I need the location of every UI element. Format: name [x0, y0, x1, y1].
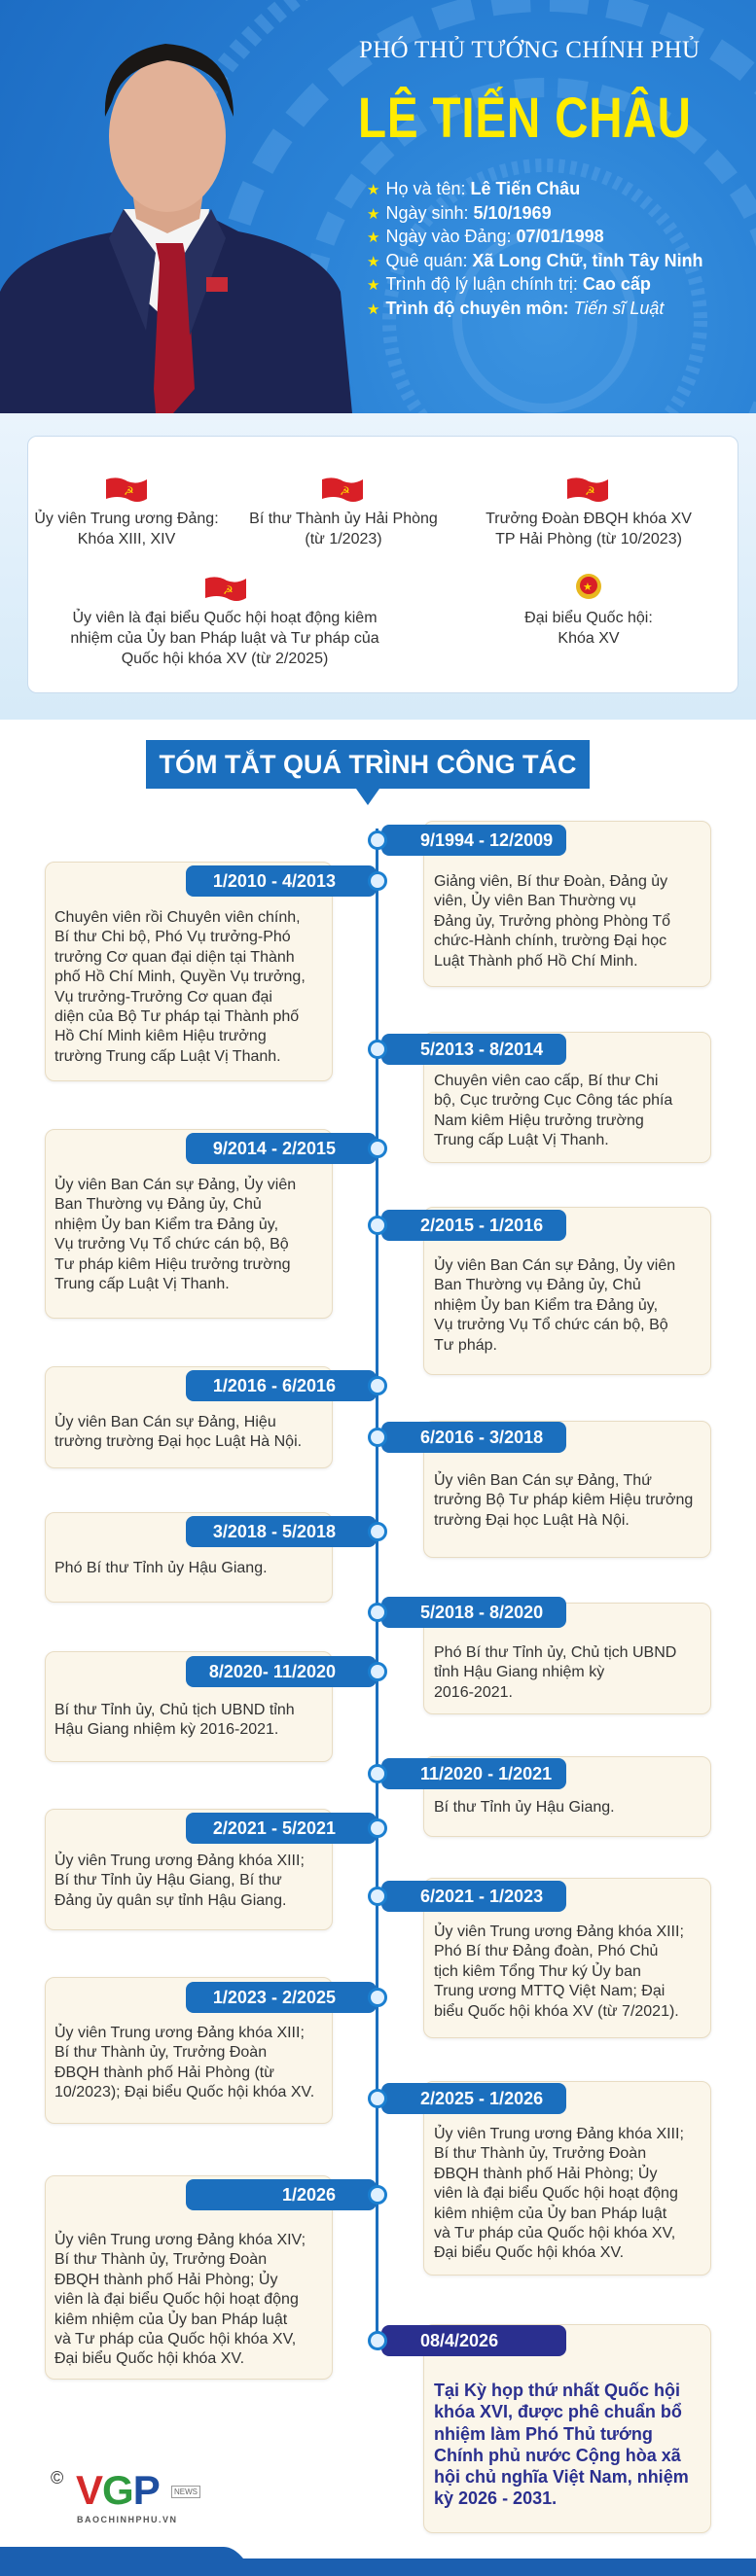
text: 2/2015 - 1/2016: [420, 1216, 543, 1235]
text: 2016-2021.: [434, 1684, 513, 1701]
icon: party flag 2: [322, 477, 363, 502]
logo: VGP: NEWS: [174, 2488, 198, 2496]
text: 2/2025 - 1/2026: [420, 2089, 543, 2108]
timeline entry: 9/2014 - 2/2015: [45, 1129, 333, 1319]
icon: party flag 4: ☭: [223, 583, 234, 597]
text: central committee: Ủy viên Trung ương Đảng:: [34, 511, 219, 527]
text: Bí thư Thành ủy, Trưởng Đoàn: [54, 2044, 267, 2061]
text: kiêm nhiệm của Ủy ban Pháp luật: [434, 2205, 666, 2222]
text: Đại biểu Quốc hội khóa XV.: [434, 2244, 624, 2261]
text: law committee: Quốc hội khóa XV (từ 2/2025): [122, 651, 328, 667]
text: kiêm nhiệm của Ủy ban Pháp luật: [54, 2311, 287, 2328]
text: NA delegation head: [486, 511, 692, 547]
text: viên là đại biểu Quốc hội hoạt động: [54, 2291, 299, 2308]
text: 6/2016 - 3/2018: [420, 1428, 543, 1447]
text: 5/2018 - 8/2020: [420, 1603, 543, 1622]
text: Ủy viên Trung ương Đảng khóa XIII;: [434, 1923, 684, 1940]
text: Phó Bí thư Tỉnh ủy, Chủ tịch UBND: [434, 1644, 676, 1661]
text: NA delegation head: Trưởng Đoàn ĐBQH khóa XV: [486, 511, 692, 527]
timeline entry: 1/2016 - 6/2016: [45, 1366, 333, 1468]
text: Tại Kỳ họp thứ nhất Quốc hội: [434, 2381, 680, 2400]
text: Giảng viên, Bí thư Đoàn, Đảng ủy: [434, 873, 667, 890]
text: 9/2014 - 2/2015: [213, 1139, 336, 1158]
text: central committee: Khóa XIII, XIV: [78, 531, 175, 547]
text: trường trường Đại học Luật Hà Nội.: [54, 1433, 302, 1450]
text: Hậu Giang nhiệm kỳ 2016-2021.: [54, 1721, 278, 1738]
text: Hai Phong secretary: (từ 1/2023): [305, 531, 382, 547]
text: central committee: [34, 510, 219, 547]
text: nhiệm làm Phó Thủ tướng: [434, 2424, 653, 2444]
suit: [0, 209, 352, 413]
text: Trung ương MTTQ Việt Nam; Đại: [434, 1983, 665, 1999]
text: Bí thư Tỉnh ủy Hậu Giang.: [434, 1799, 615, 1816]
text: 11/2020 - 1/2021: [420, 1764, 552, 1783]
text: Ban Thường vụ Đảng ủy, Chủ: [54, 1196, 262, 1213]
text: Ban Thường vụ Đảng ủy, Chủ: [434, 1277, 641, 1293]
text: nhiệm Ủy ban Kiểm tra Đảng ủy,: [434, 1297, 658, 1314]
text: 1/2023 - 2/2025: [213, 1988, 336, 2007]
timeline entry: 3/2018 - 5/2018: [45, 1512, 333, 1603]
timeline entry: 11/2020 - 1/2021: [423, 1756, 711, 1837]
text: Bí thư Tỉnh ủy, Chủ tịch UBND tỉnh: [54, 1702, 295, 1718]
icon: party flag 1: ☭: [124, 484, 134, 498]
tie: [154, 243, 195, 413]
info list: ★ Họ và tên: Lê Tiến Châu: [367, 179, 580, 198]
text: biểu Quốc hội khóa XV (từ 7/2021).: [434, 2003, 679, 2020]
section heading banner: [146, 740, 590, 805]
text: 6/2021 - 1/2023: [420, 1887, 543, 1906]
text: Ủy viên Trung ương Đảng khóa XIV;: [54, 2232, 306, 2248]
text: Ủy viên Trung ương Đảng khóa XIII;: [54, 1853, 305, 1869]
text: Phó Bí thư Đảng đoàn, Phó Chủ: [434, 1943, 658, 1959]
text: và Tư pháp của Quốc hội khóa XV,: [434, 2225, 675, 2241]
text: Chuyên viên cao cấp, Bí thư Chi: [434, 1073, 658, 1089]
info list: [367, 179, 703, 318]
timeline entry: 2/2025 - 1/2026: [423, 2081, 711, 2276]
text: Bí thư Tỉnh ủy Hậu Giang, Bí thư: [54, 1872, 282, 1888]
text: Hồ Chí Minh kiêm Hiệu trưởng: [54, 1028, 267, 1044]
text: NA delegation head: TP Hải Phòng (từ 10/2023): [495, 531, 682, 547]
text: NA deputy: [524, 610, 653, 647]
timeline entry: 1/2023 - 2/2025: [45, 1977, 333, 2124]
icon: national emblem: [576, 574, 601, 599]
shirt: [124, 209, 209, 321]
text: Vụ trưởng Vụ Tổ chức cán bộ, Bộ: [54, 1236, 289, 1253]
neck: [131, 185, 204, 233]
logo: VGP: VGP: [76, 2467, 160, 2513]
text: 2/2021 - 5/2021: [213, 1818, 336, 1838]
timeline entry: 9/1994 - 12/2009: [423, 821, 711, 987]
icon: national emblem: ★: [583, 582, 593, 593]
text: Ủy viên Trung ương Đảng khóa XIII;: [434, 2126, 684, 2142]
text: Ủy viên Ban Cán sự Đảng, Thứ: [434, 1472, 652, 1489]
info list: ★ Ngày sinh: 5/10/1969: [367, 203, 552, 223]
text: law committee: nhiệm của Ủy ban Pháp luật và Tư pháp của: [70, 630, 379, 647]
timeline entry: 2/2021 - 5/2021: [45, 1809, 333, 1930]
text: tịch kiêm Tổng Thư ký Ủy ban: [434, 1963, 641, 1980]
timeline entry: 08/4/2026 (final): [423, 2324, 711, 2533]
text: Đảng ủy, Trưởng phòng Phòng Tổ: [434, 913, 670, 930]
text: Trung cấp Luật Vị Thanh.: [434, 1132, 609, 1148]
icon: party flag 3: ☭: [585, 484, 595, 498]
text: Ủy viên Ban Cán sự Đảng, Ủy viên: [54, 1177, 296, 1193]
text: Đảng ủy quân sự tỉnh Hậu Giang.: [54, 1892, 286, 1909]
text: Phó Bí thư Tỉnh ủy Hậu Giang.: [54, 1560, 268, 1576]
timeline entry: 8/2020 - 11/2020: [45, 1651, 333, 1762]
text: viên là đại biểu Quốc hội hoạt động: [434, 2185, 678, 2202]
text: trưởng Cơ quan đại diện tại Thành: [54, 949, 295, 966]
icon: party flag 1: [106, 477, 147, 502]
text: ĐBQH thành phố Hải Phòng; Ủy: [434, 2166, 657, 2182]
text: 3/2018 - 5/2018: [213, 1522, 336, 1541]
icon: party flag 4: [205, 577, 246, 601]
text: Nam kiêm Hiệu trưởng trường: [434, 1112, 644, 1129]
text: Trung cấp Luật Vị Thanh.: [54, 1276, 230, 1292]
text: Bí thư Thành ủy, Trưởng Đoàn: [434, 2145, 646, 2162]
timeline entry: 6/2021 - 1/2023: [423, 1878, 711, 2038]
text: ĐBQH thành phố Hải Phòng; Ủy: [54, 2272, 277, 2288]
text: nhiệm Ủy ban Kiểm tra Đảng ủy,: [54, 1217, 278, 1233]
logo: VGP: ©: [51, 2468, 63, 2488]
text: phố Hồ Chí Minh, Quyền Vụ trưởng,: [54, 969, 306, 985]
text: Ủy viên Ban Cán sự Đảng, Ủy viên: [434, 1257, 675, 1274]
text: Đại biểu Quốc hội khóa XV.: [54, 2350, 244, 2367]
info list: ★ Quê quán: Xã Long Chữ, tỉnh Tây Ninh: [367, 251, 703, 270]
text: bộ, Cục trưởng Cục Công tác phía: [434, 1092, 672, 1109]
hair: [105, 44, 234, 117]
timeline entry: 2/2015 - 1/2016: [423, 1207, 711, 1375]
text: chức-Hành chính, trường Đại học: [434, 933, 666, 949]
text: Tư pháp kiêm Hiệu trưởng trường: [54, 1256, 291, 1273]
panel: positions: [27, 436, 738, 693]
text: viên, Ủy viên Ban Thường vụ: [434, 893, 636, 909]
footer bar: [0, 2547, 756, 2576]
text: Tư pháp.: [434, 1337, 497, 1354]
timeline entry: 1/2026: [45, 2175, 333, 2380]
text: Chính phủ nước Cộng hòa xã: [434, 2446, 681, 2465]
text: 1/2010 - 4/2013: [213, 871, 336, 891]
icon: party flag 3: [567, 477, 608, 502]
lapels: [109, 209, 156, 331]
text: Bí thư Chi bộ, Phó Vụ trưởng-Phó: [54, 929, 291, 945]
text: law committee: Ủy viên là đại biểu Quốc hội hoạt động kiêm: [72, 610, 378, 626]
text: Chuyên viên rồi Chuyên viên chính,: [54, 909, 301, 926]
info list: ★ Trình độ chuyên môn: Tiến sĩ Luật: [367, 299, 664, 318]
timeline line: [376, 829, 378, 2341]
info list: ★ Trình độ lý luận chính trị: Cao cấp: [367, 274, 651, 294]
title: position: PHÓ THỦ TƯỚNG CHÍNH PHỦ: [359, 37, 700, 63]
text: law committee: [70, 609, 379, 667]
logo: VGP: [51, 2467, 200, 2524]
text: NA deputy: Đại biểu Quốc hội:: [524, 610, 653, 626]
text: Hai Phong secretary: Bí thư Thành ủy Hải Phòng: [249, 511, 438, 527]
text: hội chủ nghĩa Việt Nam, nhiệm: [434, 2467, 689, 2487]
icon: party flag 2: ☭: [340, 484, 350, 498]
text: 5/2013 - 8/2014: [420, 1040, 543, 1059]
text: NA deputy: Khóa XV: [558, 630, 620, 647]
text: Vụ trưởng Vụ Tổ chức cán bộ, Bộ: [434, 1317, 668, 1333]
text: 08/4/2026: [420, 2331, 498, 2350]
text: Hai Phong secretary: [249, 511, 438, 547]
logo: VGP: BAOCHINHPHU.VN: [77, 2515, 178, 2524]
text: Ủy viên Ban Cán sự Đảng, Hiệu: [54, 1414, 276, 1430]
text: 1/2026: [282, 2185, 336, 2205]
face: [109, 60, 226, 212]
info list: ★ Ngày vào Đảng: 07/01/1998: [367, 227, 604, 246]
timeline entry: 5/2013 - 8/2014: [423, 1032, 711, 1163]
text: 9/1994 - 12/2009: [420, 830, 553, 850]
text: kỳ 2026 - 2031.: [434, 2488, 557, 2508]
text: trưởng Bộ Tư pháp kiêm Hiệu trưởng: [434, 1492, 693, 1508]
text: Luật Thành phố Hồ Chí Minh.: [434, 953, 638, 970]
light blue band: [0, 413, 756, 720]
portrait photo: [0, 44, 352, 413]
text: Bí thư Thành ủy, Trưởng Đoàn: [54, 2251, 267, 2268]
header background: [0, 0, 756, 413]
timeline entry: 1/2010 - 4/2013: [45, 862, 333, 1081]
title: name: LÊ TIẾN CHÂU: [358, 87, 692, 150]
text: trường Đại học Luật Hà Nội.: [434, 1512, 630, 1529]
text: 8/2020- 11/2020: [209, 1662, 336, 1681]
text: tỉnh Hậu Giang nhiệm kỳ: [434, 1664, 604, 1680]
text: diện của Bộ Tư pháp tại Thành phố: [54, 1008, 299, 1025]
text: Vụ trưởng-Trưởng Cơ quan đại: [54, 989, 272, 1006]
text: 10/2023); Đại biểu Quốc hội khóa XV.: [54, 2084, 314, 2100]
timeline entry: 5/2018 - 8/2020: [423, 1603, 711, 1714]
text: 1/2016 - 6/2016: [213, 1376, 336, 1395]
text: khóa XVI, được phê chuẩn bổ: [434, 2402, 682, 2421]
text: trường Trung cấp Luật Vị Thanh.: [54, 1048, 281, 1065]
pin: [206, 277, 228, 292]
text: Ủy viên Trung ương Đảng khóa XIII;: [54, 2025, 305, 2041]
text: ĐBQH thành phố Hải Phòng (từ: [54, 2064, 274, 2081]
text: và Tư pháp của Quốc hội khóa XV,: [54, 2331, 296, 2347]
timeline entry: 6/2016 - 3/2018: [423, 1421, 711, 1558]
section heading banner: TÓM TẮT QUÁ TRÌNH CÔNG TÁC: [160, 750, 576, 779]
